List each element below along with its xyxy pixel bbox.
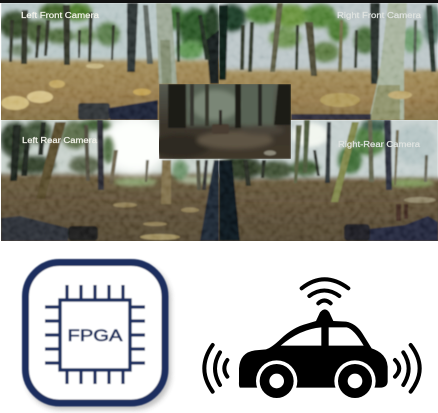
camera labels: Right-Rear Camera xyxy=(338,140,421,149)
camera labels: Right Front Camera xyxy=(337,11,422,20)
panel: center rear-view inset xyxy=(150,84,291,159)
panel: right front camera xyxy=(219,3,438,120)
mottled photo texture overlay xyxy=(1,3,438,241)
icon: FPGA chip: FPGA xyxy=(68,326,123,345)
panel: left front camera xyxy=(1,3,219,120)
icon: FPGA chip xyxy=(25,262,171,410)
camera labels: Left Rear Camera xyxy=(22,136,98,145)
camera labels: Left Front Camera xyxy=(21,11,100,20)
top black edge of video frame xyxy=(0,0,438,3)
icon: autonomous car with signal waves xyxy=(204,279,420,402)
panel: right rear camera xyxy=(219,120,438,241)
panel: left rear camera xyxy=(1,120,219,241)
camera labels xyxy=(21,11,422,149)
